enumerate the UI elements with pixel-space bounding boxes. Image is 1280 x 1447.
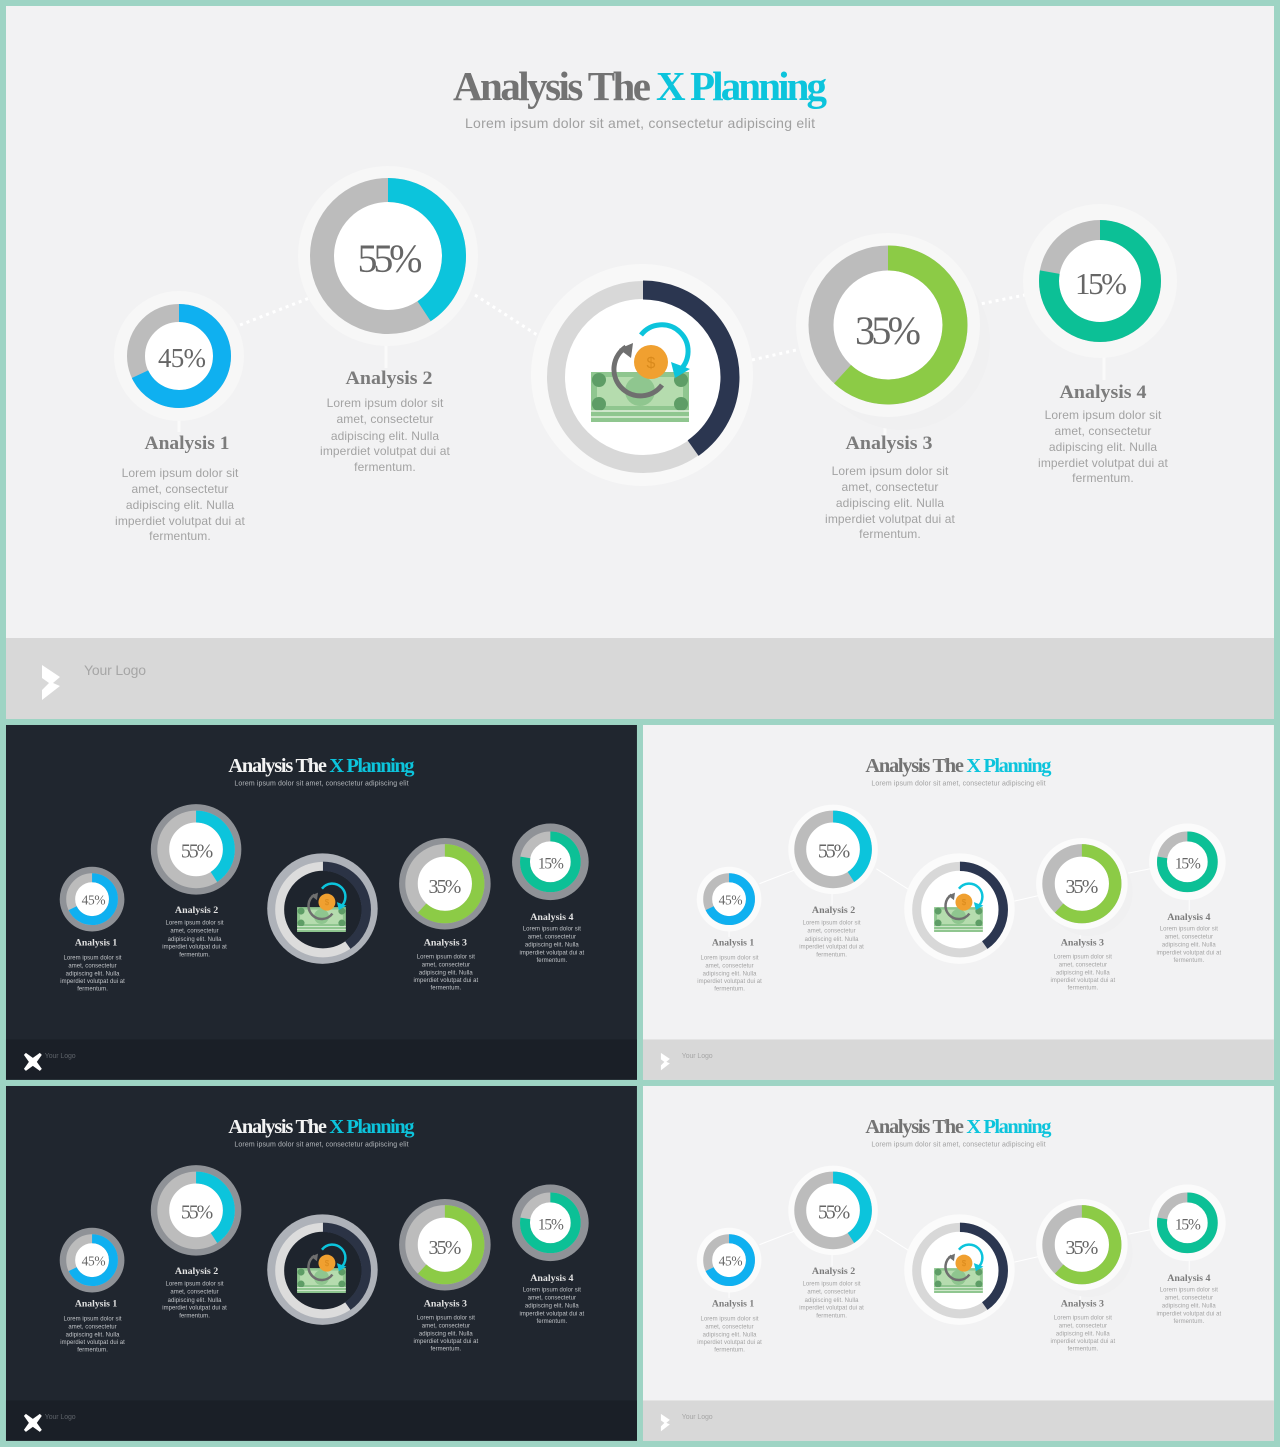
donut: 35% <box>399 838 491 929</box>
icon: money and coin: $ <box>962 898 967 907</box>
text block: Analysis 2: Lorem ipsum dolor sit <box>803 1282 861 1288</box>
text block: Analysis 3: Lorem ipsum dolor sit <box>417 954 475 960</box>
text block: Analysis 2 <box>162 1267 227 1319</box>
text block: Analysis 4: amet, consectetur <box>528 934 576 940</box>
stems <box>729 894 1189 938</box>
text block: Analysis 4 <box>1038 382 1169 485</box>
subtitle: Lorem ipsum dolor sit amet, consectetur adipiscing elit <box>234 1142 409 1149</box>
logo text: Your Logo <box>84 662 146 678</box>
donut: 45%: 45% <box>82 1254 106 1269</box>
text block: Analysis 4: Lorem ipsum dolor sit <box>1160 1287 1218 1293</box>
text block: Analysis 2: Analysis 2 <box>812 1267 856 1277</box>
icon: money and coin: $ <box>325 898 330 907</box>
text block: Analysis 4: Lorem ipsum dolor sit <box>523 1287 581 1293</box>
donut: central money icon <box>904 853 1015 964</box>
donut: 55% <box>788 805 878 894</box>
donut: 45% <box>60 867 124 931</box>
donut: 45% <box>697 867 761 931</box>
donut: 45%: 45% <box>719 893 743 908</box>
donut: 55% <box>151 1165 241 1256</box>
text block: Analysis 4: adipiscing elit. Nulla <box>1162 1303 1216 1309</box>
text block: Analysis 3: Analysis 3 <box>1061 938 1104 948</box>
logo mark <box>24 1053 42 1071</box>
text block: Analysis 1: Lorem ipsum dolor sit <box>701 955 759 961</box>
text block: Analysis 3: Lorem ipsum dolor sit <box>1054 954 1112 960</box>
icon: money and coin: $ <box>962 1259 967 1268</box>
title: Analysis The <box>865 1116 964 1138</box>
text block: Analysis 1: Lorem ipsum dolor sit <box>122 466 239 480</box>
text block: Analysis 2: amet, consectetur <box>170 1289 219 1295</box>
text block: Analysis 2: adipiscing elit. Nulla <box>168 937 222 943</box>
donut: 45% <box>114 291 244 421</box>
text block: Analysis 4: adipiscing elit. Nulla <box>525 942 579 948</box>
text block: Analysis 1: Analysis 1 <box>75 938 117 948</box>
donut: 35%: 35% <box>428 876 461 898</box>
logo text: Your Logo <box>682 1053 713 1060</box>
text block: Analysis 3: adipiscing elit. Nulla <box>419 970 473 976</box>
logo mark <box>42 665 60 700</box>
subtitle: Lorem ipsum dolor sit amet, consectetur adipiscing elit <box>234 781 409 788</box>
text block: Analysis 4: Analysis 4 <box>1167 913 1211 923</box>
text block: Analysis 4: fermentum. <box>1174 1319 1204 1325</box>
donut: 35%: 35% <box>1065 1237 1098 1259</box>
donut: 15%: 15% <box>1175 855 1201 872</box>
subtitle: Lorem ipsum dolor sit amet, consectetur adipiscing elit <box>871 781 1046 788</box>
panel: dark slide top <box>6 725 637 1080</box>
text block: Analysis 1: fermentum. <box>77 987 108 993</box>
text block: Analysis 1: Lorem ipsum dolor sit <box>64 955 122 961</box>
logo text: Your Logo <box>45 1414 76 1421</box>
title <box>865 1116 1052 1138</box>
text block: Analysis 1: fermentum. <box>77 1348 108 1354</box>
text block: Analysis 2: imperdiet volutpat dui at <box>162 1305 227 1311</box>
text block: Analysis 3: fermentum. <box>431 1347 461 1353</box>
title: Analysis The <box>228 1116 327 1138</box>
donut: 35% <box>796 233 980 417</box>
donut: central money icon <box>904 1214 1015 1325</box>
text block: Analysis 1: amet, consectetur <box>705 963 754 969</box>
text block: Analysis 4: Analysis 4 <box>530 1274 574 1284</box>
text block: Analysis 4: imperdiet volutpat dui at <box>1157 950 1221 956</box>
text block: Analysis 2: adipiscing elit. Nulla <box>805 937 859 943</box>
text block: Analysis 2: Lorem ipsum dolor sit <box>166 1282 224 1288</box>
text block: Analysis 4: imperdiet volutpat dui at <box>1038 456 1169 470</box>
text block: Analysis 3: fermentum. <box>1068 986 1098 992</box>
text block: Analysis 2: fermentum. <box>179 952 210 958</box>
text block: Analysis 3 <box>825 433 956 541</box>
panel: dark slide bottom <box>6 1086 637 1441</box>
text block: Analysis 3: Lorem ipsum dolor sit <box>1054 1315 1112 1321</box>
text block: Analysis 1: Lorem ipsum dolor sit <box>701 1316 759 1322</box>
text block: Analysis 3: imperdiet volutpat dui at <box>414 978 478 984</box>
text block: Analysis 2: Lorem ipsum dolor sit <box>166 921 224 927</box>
donut: 35%: 35% <box>1065 876 1098 898</box>
donut: 35%: 35% <box>428 1237 461 1259</box>
text block: Analysis 1: amet, consectetur <box>68 1324 117 1330</box>
title: Analysis The <box>453 63 651 109</box>
text block: Analysis 4: fermentum. <box>1174 958 1204 964</box>
text block: Analysis 4: amet, consectetur <box>528 1295 576 1301</box>
title: X Planning <box>966 1116 1052 1138</box>
panel: light slide top <box>643 725 1274 1080</box>
text block: Analysis 3: amet, consectetur <box>1059 1323 1107 1329</box>
text block: Analysis 4: Lorem ipsum dolor sit <box>1160 926 1218 932</box>
donut: 55%: 55% <box>358 236 422 281</box>
text block: Analysis 3: Analysis 3 <box>424 938 467 948</box>
text block: Analysis 2 <box>799 906 864 958</box>
logo text: Your Logo <box>45 1053 76 1060</box>
text block: Analysis 3 <box>1051 938 1115 992</box>
text block: Analysis 1: Analysis 1 <box>712 938 754 948</box>
title <box>228 755 415 777</box>
text block: Analysis 1 <box>60 938 125 993</box>
text block: Analysis 1 <box>697 938 762 993</box>
text block: Analysis 4: imperdiet volutpat dui at <box>520 1311 584 1317</box>
text block: Analysis 1: Analysis 1 <box>75 1299 117 1309</box>
text block: Analysis 2: amet, consectetur <box>807 928 856 934</box>
donut: 55% <box>298 166 478 346</box>
donut: 45% <box>697 1228 761 1292</box>
text block: Analysis 2: fermentum. <box>816 1313 847 1319</box>
text block: Analysis 2: Lorem ipsum dolor sit <box>327 396 444 410</box>
donut: 35% <box>1036 1199 1128 1290</box>
donut: 55%: 55% <box>818 840 850 862</box>
text block: Analysis 4: Analysis 4 <box>530 913 574 923</box>
text block: Analysis 3: imperdiet volutpat dui at <box>1051 978 1115 984</box>
connectors <box>759 1230 1150 1262</box>
donut: 45%: 45% <box>158 343 206 373</box>
donut: 45%: 45% <box>719 1254 743 1269</box>
text block: Analysis 4: fermentum. <box>1072 471 1134 485</box>
donut: 55%: 55% <box>181 1201 213 1223</box>
text block: Analysis 2 <box>320 368 451 474</box>
icon: money and coin <box>591 325 690 422</box>
text block: Analysis 4 <box>1157 913 1221 964</box>
text block: Analysis 4: amet, consectetur <box>1165 934 1213 940</box>
donut: central money icon <box>267 853 378 964</box>
icon: money and coin: $ <box>325 1259 330 1268</box>
text block: Analysis 2: amet, consectetur <box>336 412 434 426</box>
text block: Analysis 3: Lorem ipsum dolor sit <box>832 464 949 478</box>
text block: Analysis 3: Lorem ipsum dolor sit <box>417 1315 475 1321</box>
text block: Analysis 3: Analysis 3 <box>846 433 932 454</box>
text block: Analysis 4: amet, consectetur <box>1054 424 1152 438</box>
text block: Analysis 4: adipiscing elit. Nulla <box>525 1303 579 1309</box>
text block: Analysis 4: Analysis 4 <box>1060 382 1147 403</box>
donut: 45% <box>60 1228 124 1292</box>
donut: 55% <box>788 1166 878 1255</box>
title <box>453 63 828 109</box>
panel: light slide bottom <box>643 1086 1274 1441</box>
text block: Analysis 4: adipiscing elit. Nulla <box>1049 440 1157 454</box>
text block: Analysis 3: adipiscing elit. Nulla <box>836 496 944 510</box>
logo text: Your Logo <box>682 1414 713 1421</box>
text block: Analysis 3: amet, consectetur <box>422 1323 470 1329</box>
text block: Analysis 4: amet, consectetur <box>1165 1295 1213 1301</box>
donut: 15%: 15% <box>1175 1216 1201 1233</box>
text block: Analysis 3 <box>414 938 478 992</box>
text block: Analysis 1: amet, consectetur <box>131 482 229 496</box>
text block: Analysis 1: adipiscing elit. Nulla <box>126 498 234 512</box>
text block: Analysis 2: Analysis 2 <box>175 906 219 916</box>
text block: Analysis 2: imperdiet volutpat dui at <box>799 1305 864 1311</box>
text block: Analysis 1 <box>60 1299 125 1354</box>
donut: central money icon <box>267 1214 378 1325</box>
text block: Analysis 4: Lorem ipsum dolor sit <box>1045 408 1162 422</box>
donut: central money icon <box>531 264 753 486</box>
text block: Analysis 3: adipiscing elit. Nulla <box>419 1331 473 1337</box>
subtitle: Lorem ipsum dolor sit amet, consectetur adipiscing elit <box>871 1142 1046 1149</box>
text block: Analysis 3 <box>414 1299 478 1353</box>
text block: Analysis 2: imperdiet volutpat dui at <box>320 444 451 458</box>
text block: Analysis 3: fermentum. <box>1068 1347 1098 1353</box>
text block: Analysis 2 <box>799 1267 864 1319</box>
donut: 55%: 55% <box>181 840 213 862</box>
title: X Planning <box>656 63 828 109</box>
donut: 15%: 15% <box>538 855 564 872</box>
text block: Analysis 1: imperdiet volutpat dui at <box>115 514 246 528</box>
text block: Analysis 2: amet, consectetur <box>170 928 219 934</box>
text block: Analysis 2: imperdiet volutpat dui at <box>162 944 227 950</box>
text block: Analysis 1: fermentum. <box>714 987 745 993</box>
dotted connectors <box>240 295 1025 360</box>
title <box>228 1116 415 1138</box>
title: Analysis The <box>865 755 964 777</box>
text block: Analysis 1: amet, consectetur <box>705 1324 754 1330</box>
text block: Analysis 3: amet, consectetur <box>841 480 939 494</box>
donut: 35% <box>1036 838 1128 929</box>
text block: Analysis 1: adipiscing elit. Nulla <box>66 1332 120 1338</box>
text block: Analysis 2: Analysis 2 <box>175 1267 219 1277</box>
text block: Analysis 4: Lorem ipsum dolor sit <box>523 926 581 932</box>
text block: Analysis 4: imperdiet volutpat dui at <box>520 950 584 956</box>
text block: Analysis 4 <box>520 1274 584 1325</box>
text block: Analysis 2: Analysis 2 <box>812 906 856 916</box>
text block: Analysis 4: fermentum. <box>537 958 567 964</box>
text block: Analysis 1: imperdiet volutpat dui at <box>60 979 125 985</box>
donut: 15% <box>1149 824 1226 900</box>
text block: Analysis 1: adipiscing elit. Nulla <box>703 971 757 977</box>
text block: Analysis 3: imperdiet volutpat dui at <box>1051 1339 1115 1345</box>
text block: Analysis 3: Analysis 3 <box>424 1299 467 1309</box>
text block: Analysis 4 <box>520 913 584 964</box>
text block: Analysis 1 <box>697 1299 762 1354</box>
text block: Analysis 1: Analysis 1 <box>144 433 230 454</box>
text block: Analysis 4 <box>1157 1274 1221 1325</box>
text block: Analysis 1: fermentum. <box>714 1348 745 1354</box>
donut: 55% <box>151 804 241 895</box>
text block: Analysis 2: adipiscing elit. Nulla <box>331 429 439 443</box>
donut: 45%: 45% <box>82 893 106 908</box>
icon: money and coin: $ <box>647 355 656 372</box>
logo mark <box>661 1053 670 1070</box>
donut: 15%: 15% <box>1075 266 1127 301</box>
text block: Analysis 3: Analysis 3 <box>1061 1299 1104 1309</box>
stems <box>729 1255 1189 1299</box>
subtitle: Lorem ipsum dolor sit amet, consectetur adipiscing elit <box>465 115 815 131</box>
text block: Analysis 1: adipiscing elit. Nulla <box>66 971 120 977</box>
donut: 55%: 55% <box>818 1201 850 1223</box>
title: Analysis The <box>228 755 327 777</box>
panel: main light slide <box>6 6 1274 719</box>
title: X Planning <box>966 755 1052 777</box>
text block: Analysis 2: fermentum. <box>816 952 847 958</box>
donut: 15% <box>1023 204 1177 358</box>
text block: Analysis 1: imperdiet volutpat dui at <box>60 1340 125 1346</box>
text block: Analysis 3: imperdiet volutpat dui at <box>825 512 956 526</box>
text block: Analysis 3: fermentum. <box>859 527 921 541</box>
text block: Analysis 1: imperdiet volutpat dui at <box>697 979 762 985</box>
text block: Analysis 3: imperdiet volutpat dui at <box>414 1339 478 1345</box>
text block: Analysis 3: adipiscing elit. Nulla <box>1056 970 1110 976</box>
text block: Analysis 3: adipiscing elit. Nulla <box>1056 1331 1110 1337</box>
text block: Analysis 2: amet, consectetur <box>807 1289 856 1295</box>
text block: Analysis 3: amet, consectetur <box>422 962 470 968</box>
text block: Analysis 2: fermentum. <box>179 1313 210 1319</box>
donut: 15% <box>1149 1185 1226 1261</box>
connectors <box>759 869 1150 901</box>
text block: Analysis 2: adipiscing elit. Nulla <box>805 1298 859 1304</box>
donut: 15% <box>512 824 589 900</box>
text block: Analysis 3: fermentum. <box>431 986 461 992</box>
title: X Planning <box>329 1116 415 1138</box>
stems <box>179 345 1104 435</box>
text block: Analysis 4: fermentum. <box>537 1319 567 1325</box>
text block: Analysis 3: amet, consectetur <box>1059 962 1107 968</box>
donut: 35%: 35% <box>855 308 921 353</box>
text block: Analysis 2: imperdiet volutpat dui at <box>799 944 864 950</box>
text block: Analysis 3 <box>1051 1299 1115 1353</box>
text block: Analysis 4: Analysis 4 <box>1167 1274 1211 1284</box>
text block: Analysis 1: imperdiet volutpat dui at <box>697 1340 762 1346</box>
donut: 15% <box>512 1185 589 1261</box>
text block: Analysis 1 <box>115 433 246 543</box>
text block: Analysis 2: fermentum. <box>354 460 416 474</box>
text block: Analysis 1: amet, consectetur <box>68 963 117 969</box>
title <box>865 755 1052 777</box>
text block: Analysis 1: fermentum. <box>149 529 211 543</box>
text block: Analysis 4: adipiscing elit. Nulla <box>1162 942 1216 948</box>
title: X Planning <box>329 755 415 777</box>
text block: Analysis 1: Analysis 1 <box>712 1299 754 1309</box>
logo mark <box>661 1414 670 1431</box>
text block: Analysis 1: adipiscing elit. Nulla <box>703 1332 757 1338</box>
text block: Analysis 2 <box>162 906 227 958</box>
text block: Analysis 4: imperdiet volutpat dui at <box>1157 1311 1221 1317</box>
text block: Analysis 2: Analysis 2 <box>346 368 432 389</box>
logo mark <box>24 1414 42 1432</box>
text block: Analysis 2: Lorem ipsum dolor sit <box>803 921 861 927</box>
text block: Analysis 2: adipiscing elit. Nulla <box>168 1298 222 1304</box>
donut: 15%: 15% <box>538 1216 564 1233</box>
donut: 35% <box>399 1199 491 1290</box>
text block: Analysis 1: Lorem ipsum dolor sit <box>64 1316 122 1322</box>
